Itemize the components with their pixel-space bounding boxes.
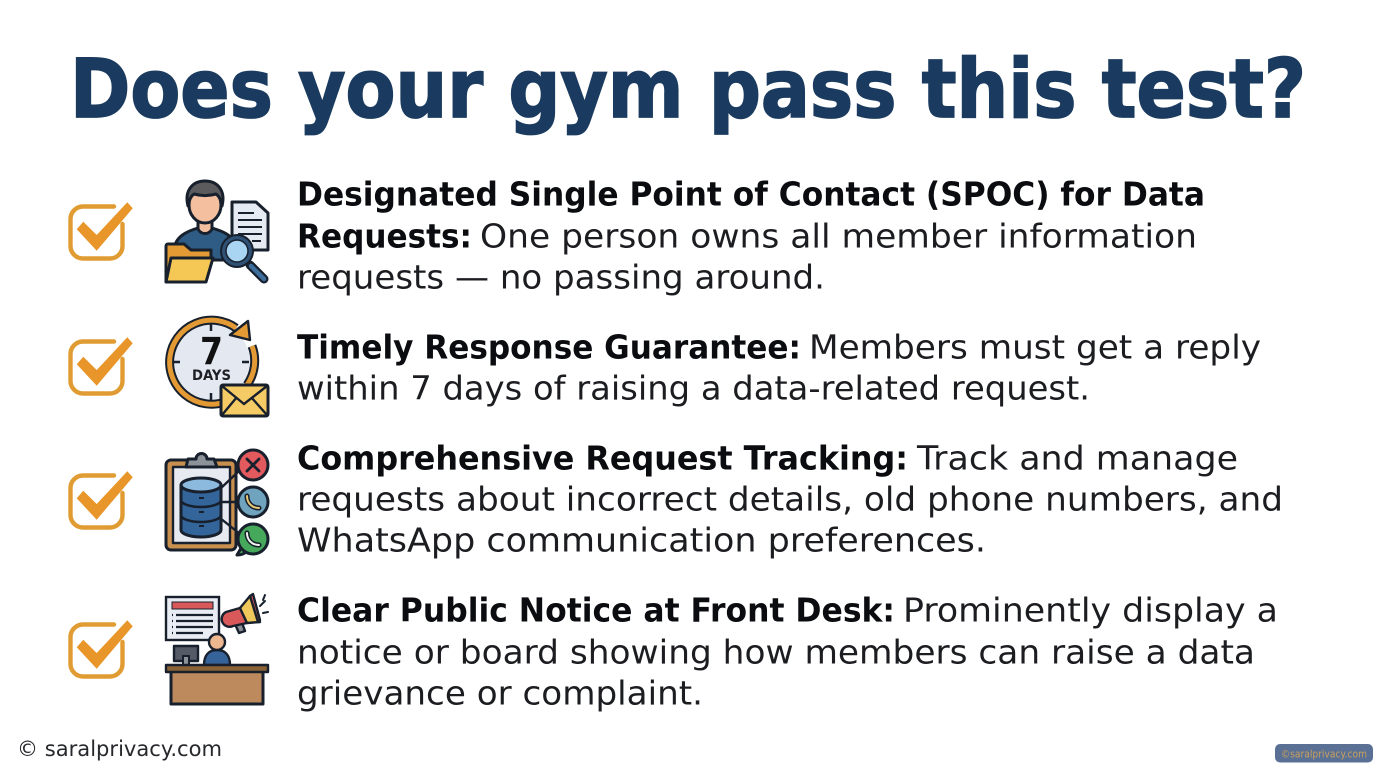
icon: person with document, folder and magnifier <box>166 181 268 282</box>
icon: checkbox 3 <box>70 471 133 528</box>
text: public notice description: grievance or complaint. <box>297 673 703 712</box>
text: timely response description: Timely Response Guarantee: <box>297 327 801 366</box>
text: request tracking description: WhatsApp communication preferences. <box>297 520 986 559</box>
icon: checkbox 2 <box>70 337 133 394</box>
text: public notice description: notice or board showing how members can raise a data <box>297 632 1255 671</box>
checklist item 4: public notice <box>70 590 1278 712</box>
text: timely response description <box>297 327 1261 407</box>
text: public notice description: Prominently display a <box>903 590 1278 629</box>
icon: 7 days clock with envelope <box>170 320 268 416</box>
footer copyright: © saralprivacy.com <box>17 737 222 761</box>
text: request tracking description <box>297 438 1283 559</box>
icon: 7 days clock with envelope: DAYS <box>192 368 231 384</box>
icon: clipboard with database and channel badges <box>166 450 268 555</box>
icon: 7 days clock with envelope: 7 <box>200 330 223 373</box>
text: request tracking description: Track and manage <box>916 438 1238 477</box>
text: public notice description <box>297 590 1278 712</box>
checklist item 3: request tracking <box>70 438 1283 559</box>
text: timely response description: within 7 days of raising a data-related request. <box>297 368 1090 407</box>
text: SPOC description <box>297 174 1205 296</box>
text: public notice description: Clear Public Notice at Front Desk: <box>297 590 895 629</box>
icon: checkbox 4 <box>70 620 133 676</box>
watermark badge <box>1275 744 1373 762</box>
checklist item 1: SPOC <box>70 174 1205 296</box>
icon: checkbox 1 <box>70 202 133 258</box>
text: SPOC description: Designated Single Point of Contact (SPOC) for Data <box>297 174 1205 213</box>
icon: notice board, megaphone and front desk <box>166 594 268 704</box>
checklist item 2: timely response <box>70 320 1261 416</box>
text: timely response description: Members must get a reply <box>809 327 1261 366</box>
text: SPOC description: Requests: <box>297 216 472 255</box>
text: request tracking description: requests about incorrect details, old phone numbers, and <box>297 479 1283 518</box>
text: request tracking description: Comprehensive Request Tracking: <box>297 438 908 477</box>
text: SPOC description: requests — no passing around. <box>297 257 825 296</box>
text: SPOC description: One person owns all member information <box>480 216 1197 255</box>
